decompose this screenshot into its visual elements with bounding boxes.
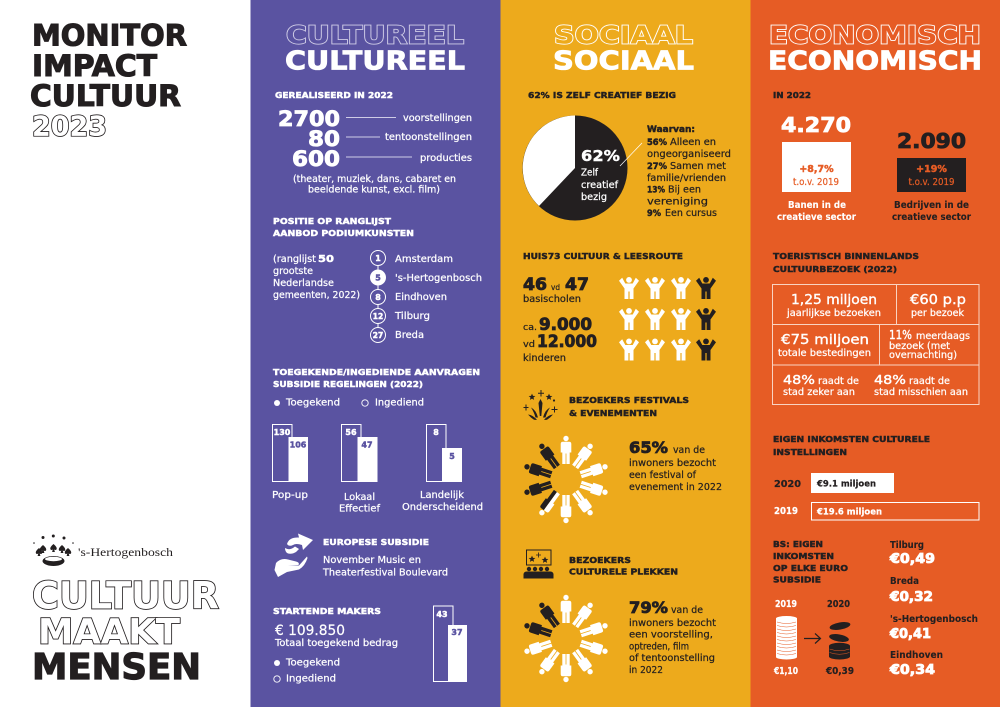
text block: europese subsidie xyxy=(322,537,448,578)
table: toeristisch bezoek: overnachting) xyxy=(889,350,957,361)
heading: economisch: ECONOMISCH xyxy=(768,46,982,76)
logo: 's-Hertogenbosch crown: 's-Hertogenbosch xyxy=(78,545,173,559)
heading: cultureel xyxy=(285,20,465,76)
stat: bedrijven xyxy=(892,129,971,223)
heading: toeristisch xyxy=(773,251,919,274)
text block: positie op ranglijst: grootste xyxy=(273,266,313,277)
chart: coin stacks 2019 to 2020: €0,39 xyxy=(825,666,854,677)
icon: hand with exchange arrows xyxy=(274,534,313,577)
bar chart: eigen inkomsten: €19.6 miljoen xyxy=(816,508,882,518)
pie chart: 62%: 62% xyxy=(581,147,620,165)
heading: economisch xyxy=(768,20,982,76)
icon: fireworks xyxy=(524,390,558,420)
heading: bs eigen inkomsten: SUBSIDIE xyxy=(773,574,821,584)
bar chart: subsidie regelingen: 106 xyxy=(290,440,307,450)
stat: banen: creatieve sector xyxy=(777,212,856,223)
text block: gerealiseerd in 2022: 80 xyxy=(308,127,340,151)
bar chart: subsidie regelingen: Onderscheidend xyxy=(402,502,483,513)
text block: positie op ranglijst: (ranglijst xyxy=(273,254,316,265)
heading: eigen inkomsten xyxy=(773,434,930,457)
bar chart: eigen inkomsten: 2019 xyxy=(774,506,798,517)
text block: huis73 numbers xyxy=(523,275,597,364)
list: city comparison: €0,41 xyxy=(889,626,931,642)
heading: aanvragen subsidie: SUBSIDIE REGELINGEN (2022) xyxy=(273,379,423,389)
pie chart: 62% xyxy=(522,116,642,220)
table: toeristisch bezoek: raadt de xyxy=(909,376,950,387)
heading: huis73: HUIS73 CULTUUR & LEESROUTE xyxy=(523,251,683,261)
stat: bedrijven: Bedrijven in de xyxy=(894,200,969,211)
heading: aanvragen subsidie: TOEGEKENDE/INGEDIENDE AANVRAGEN xyxy=(273,367,480,377)
text block: gerealiseerd in 2022: voorstellingen xyxy=(403,113,472,124)
text block: waarvan: Een cursus xyxy=(665,208,717,219)
legend xyxy=(274,398,424,408)
stat: banen xyxy=(777,113,856,223)
stat: banen: t.o.v. 2019 xyxy=(793,177,839,188)
text block: positie op ranglijst: POSITIE OP RANGLIJST xyxy=(273,216,391,226)
bar chart: eigen inkomsten: 2020 xyxy=(774,479,801,490)
chart: ranking list: 1 xyxy=(375,254,381,263)
heading: sociaal: SOCIAAL xyxy=(553,46,694,76)
text block: europese subsidie: EUROPESE SUBSIDIE xyxy=(323,537,429,547)
heading: bezoekers festivals: BEZOEKERS FESTIVALS xyxy=(569,395,689,405)
text block: 65% xyxy=(629,438,722,493)
heading: bezoekers culturele plekken: BEZOEKERS xyxy=(569,555,631,565)
heading: bezoekers festivals xyxy=(569,395,689,418)
text block: huis73 numbers: 47 xyxy=(565,275,589,295)
list: city comparison xyxy=(889,540,978,678)
table: toeristisch bezoek: €75 miljoen xyxy=(781,332,869,348)
table: toeristisch bezoek: jaarlijkse bezoeken xyxy=(786,308,881,319)
text block: huis73 numbers: vd xyxy=(523,340,535,350)
title: 2023 xyxy=(32,110,107,142)
heading: bezoekers culturele plekken: CULTURELE PLEKKEN xyxy=(569,566,678,576)
heading: cultureel: CULTUREEL xyxy=(285,46,465,76)
text block: startende makers xyxy=(273,606,398,684)
chart: ranking list: Amsterdam xyxy=(395,254,453,265)
title: IMPACT xyxy=(32,49,157,83)
icon grid: people with raised arms xyxy=(619,277,716,360)
bar chart: startende makers: 43 xyxy=(436,610,448,619)
text block: 79%: of tentoonstelling xyxy=(629,653,715,664)
text block: 79%: een voorstelling, xyxy=(629,630,713,640)
stat: bedrijven: t.o.v. 2019 xyxy=(908,177,955,188)
text block: startende makers: Toegekend xyxy=(285,658,340,668)
heading: sociaal xyxy=(553,20,694,76)
heading: in 2022: IN 2022 xyxy=(773,90,811,100)
icon ring: 79% of people xyxy=(523,595,609,682)
chart: coin stacks 2019 to 2020: 2019 xyxy=(775,599,797,610)
table: toeristisch bezoek: bezoek (met xyxy=(889,341,950,352)
stat: bedrijven: +19% xyxy=(916,164,947,175)
bar chart: subsidie regelingen: 56 xyxy=(345,428,357,437)
text block: waarvan: Waarvan: xyxy=(647,125,695,135)
text block: waarvan xyxy=(647,125,731,219)
icon: theatre audience xyxy=(524,550,554,578)
heading: bs eigen inkomsten: INKOMSTEN xyxy=(773,551,834,561)
stat: banen: +8,7% xyxy=(799,164,834,175)
slogan: cultuur maakt mensen: MAAKT xyxy=(38,612,180,652)
text block: europese subsidie: November Music en xyxy=(323,555,421,566)
text block: huis73 numbers: ca. xyxy=(523,323,537,333)
text block: europese subsidie: Theaterfestival Boulevard xyxy=(322,568,448,578)
heading: sociaal: SOCIAAL xyxy=(554,20,693,50)
heading: bezoekers festivals: & EVENEMENTEN xyxy=(569,408,657,418)
bar chart: startende makers: 37 xyxy=(451,628,463,637)
chart: ranking list: Eindhoven xyxy=(395,292,447,303)
text block: 65%: evenement in 2022 xyxy=(629,482,722,493)
text block: 79%: in 2022 xyxy=(629,665,663,676)
bar chart: subsidie regelingen: 47 xyxy=(361,440,373,450)
text block: waarvan: 27% xyxy=(647,162,667,172)
bar chart: eigen inkomsten: €9.1 miljoen xyxy=(816,480,876,490)
title xyxy=(30,18,187,142)
slogan: cultuur maakt mensen: MENSEN xyxy=(32,647,201,688)
text block: gerealiseerd in 2022: producties xyxy=(420,153,472,164)
heading: cultureel: CULTUREEL xyxy=(286,20,464,50)
heading: bs eigen inkomsten: OP ELKE EURO xyxy=(773,563,848,573)
text block: 65%: inwoners bezocht xyxy=(629,458,716,469)
bar chart: subsidie regelingen: 5 xyxy=(449,452,455,461)
bar chart: subsidie regelingen: Landelijk xyxy=(420,490,465,501)
table: toeristisch bezoek: stad zeker aan xyxy=(783,387,855,398)
text block: 79%: optreden, film xyxy=(629,642,689,652)
text block: waarvan: 13% xyxy=(647,186,665,196)
bar chart: subsidie regelingen: 130 xyxy=(274,428,291,437)
heading: bs eigen inkomsten xyxy=(773,539,848,584)
bar chart: subsidie regelingen: Pop-up xyxy=(272,490,308,501)
chart: ranking list: 's-Hertogenbosch xyxy=(395,273,482,284)
chart: ranking list: 8 xyxy=(375,293,381,302)
icon ring: 65% of people xyxy=(523,436,609,523)
pie chart: 62%: Zelf xyxy=(581,168,599,178)
pie chart: 62%: creatief xyxy=(581,180,619,191)
heading: eigen inkomsten: INSTELLINGEN xyxy=(773,447,847,457)
logo: 's-Hertogenbosch crown xyxy=(33,534,173,566)
legend: Ingediend xyxy=(375,398,424,408)
text block: huis73 numbers: 12.000 xyxy=(537,332,597,352)
chart: ranking list: 27 xyxy=(373,331,383,340)
table: toeristisch bezoek: €60 p.p xyxy=(910,292,966,308)
chart: coin stacks 2019 to 2020 xyxy=(773,599,854,677)
chart: coin stacks 2019 to 2020: 2020 xyxy=(827,599,850,610)
text block: 65%: van de xyxy=(673,445,705,456)
text block: startende makers: STARTENDE MAKERS xyxy=(273,606,381,616)
chart: ranking list xyxy=(370,250,482,342)
text block: huis73 numbers: vd xyxy=(551,283,560,292)
text block: waarvan: Samen met xyxy=(670,161,726,172)
table: toeristisch bezoek: 48% xyxy=(783,372,815,387)
chart: ranking list: Breda xyxy=(395,330,424,341)
panel: sociaal xyxy=(500,0,750,707)
text block: huis73 numbers: 46 xyxy=(523,275,547,295)
bar chart: subsidie regelingen: Effectief xyxy=(339,504,381,514)
stat: banen: 4.270 xyxy=(781,113,851,137)
bar chart: subsidie regelingen: 8 xyxy=(433,428,439,437)
text block: waarvan: ongeorganiseerd xyxy=(647,149,731,160)
table: toeristisch bezoek: stad misschien aan xyxy=(874,387,968,398)
title: MONITOR xyxy=(32,18,187,52)
text block: waarvan: familie/vrienden xyxy=(647,173,726,184)
text block: gerealiseerd in 2022: 600 xyxy=(292,147,340,171)
text block: huis73 numbers: basischolen xyxy=(523,294,581,305)
text block: waarvan: 9% xyxy=(647,209,661,219)
list: city comparison: Breda xyxy=(890,576,919,587)
bar chart: eigen inkomsten xyxy=(774,473,979,520)
text block: startende makers: Totaal toegekend bedrag xyxy=(274,638,398,649)
text block: gerealiseerd in 2022: GEREALISEERD IN 2022 xyxy=(275,90,393,100)
text block: gerealiseerd in 2022: 2700 xyxy=(278,107,340,131)
panel: cultureel xyxy=(250,0,500,707)
slogan: cultuur maakt mensen xyxy=(32,574,219,688)
heading: bs eigen inkomsten: BS: EIGEN xyxy=(773,539,823,549)
table: toeristisch bezoek: per bezoek xyxy=(911,308,965,319)
table: toeristisch bezoek: 11% xyxy=(889,328,912,342)
panel: economisch xyxy=(750,0,1000,707)
chart: ranking list: 5 xyxy=(375,274,381,282)
text block: gerealiseerd in 2022 xyxy=(275,90,472,196)
table: toeristisch bezoek: 48% xyxy=(874,372,906,387)
stat: banen: Banen in de xyxy=(788,200,846,211)
table: toeristisch bezoek: totale bestedingen xyxy=(778,348,871,359)
text block: 79% xyxy=(629,598,716,676)
text block: waarvan: Bij een xyxy=(668,184,701,196)
chart: ranking list: Tilburg xyxy=(394,311,430,322)
text block: positie op ranglijst: AANBOD PODIUMKUNSTEN xyxy=(273,228,414,238)
list: city comparison: €0,49 xyxy=(889,551,935,567)
heading: toeristisch: CULTUURBEZOEK (2022) xyxy=(773,264,897,274)
text block: startende makers: Ingediend xyxy=(286,674,336,684)
text block: waarvan: Alleen en xyxy=(670,137,716,148)
text block: positie op ranglijst xyxy=(273,216,414,301)
table: toeristisch bezoek xyxy=(772,284,979,404)
text block: 79%: van de xyxy=(671,605,703,616)
text block: 65%: een festival of xyxy=(629,470,697,481)
text block: huis73 numbers: kinderen xyxy=(523,353,566,364)
table: toeristisch bezoek: raadt de xyxy=(818,376,859,387)
table: toeristisch bezoek: meerdaags xyxy=(916,331,970,342)
panel: intro column xyxy=(0,0,251,707)
heading: eigen inkomsten: EIGEN INKOMSTEN CULTURELE xyxy=(773,434,930,444)
heading: 62% is zelf creatief bezig: 62% IS ZELF CREATIEF BEZIG xyxy=(528,90,676,100)
bar chart: subsidie regelingen xyxy=(272,424,483,514)
text block: waarvan: vereniging xyxy=(647,196,708,208)
text block: gerealiseerd in 2022: tentoonstellingen xyxy=(385,132,472,143)
list: city comparison: 's-Hertogenbosch xyxy=(890,614,978,625)
text block: gerealiseerd in 2022: (theater, muziek, dans, cabaret en xyxy=(293,174,456,185)
text block: positie op ranglijst: Nederlandse xyxy=(273,278,334,289)
pie chart: 62%: bezig xyxy=(581,192,607,203)
text block: 79%: 79% xyxy=(629,598,668,617)
stat: bedrijven: creatieve sector xyxy=(892,212,971,223)
text block: positie op ranglijst: 50 xyxy=(318,254,334,265)
legend: Toegekend xyxy=(285,398,340,408)
title: CULTUUR xyxy=(30,79,181,113)
text block: huis73 numbers: 9.000 xyxy=(539,315,592,335)
arrow xyxy=(804,634,820,644)
bar chart: subsidie regelingen: Lokaal xyxy=(344,492,375,503)
text block: waarvan: 56% xyxy=(647,138,667,148)
chart: coin stacks 2019 to 2020: €1,10 xyxy=(773,666,798,677)
text block: 79%: inwoners bezocht xyxy=(629,618,716,629)
list: city comparison: Eindhoven xyxy=(890,650,943,661)
heading: toeristisch: TOERISTISCH BINNENLANDS xyxy=(773,251,919,261)
bar chart: startende makers xyxy=(434,606,467,682)
list: city comparison: €0,32 xyxy=(889,589,933,605)
text block: startende makers: € 109.850 xyxy=(275,623,345,639)
chart: ranking list: 12 xyxy=(373,312,383,321)
list: city comparison: €0,34 xyxy=(889,662,935,678)
slogan: cultuur maakt mensen: CULTUUR xyxy=(32,574,219,618)
list: city comparison: Tilburg xyxy=(890,540,924,551)
table: toeristisch bezoek: 1,25 miljoen xyxy=(791,292,877,308)
heading: bezoekers culturele plekken xyxy=(569,555,678,576)
heading: economisch: ECONOMISCH xyxy=(769,20,981,50)
stat: bedrijven: 2.090 xyxy=(897,129,966,153)
text block: positie op ranglijst: gemeenten, 2022) xyxy=(273,290,360,301)
heading: aanvragen subsidie xyxy=(273,367,480,389)
text block: gerealiseerd in 2022: beeldende kunst, excl. film) xyxy=(308,184,440,196)
text block: 65%: 65% xyxy=(629,438,668,457)
